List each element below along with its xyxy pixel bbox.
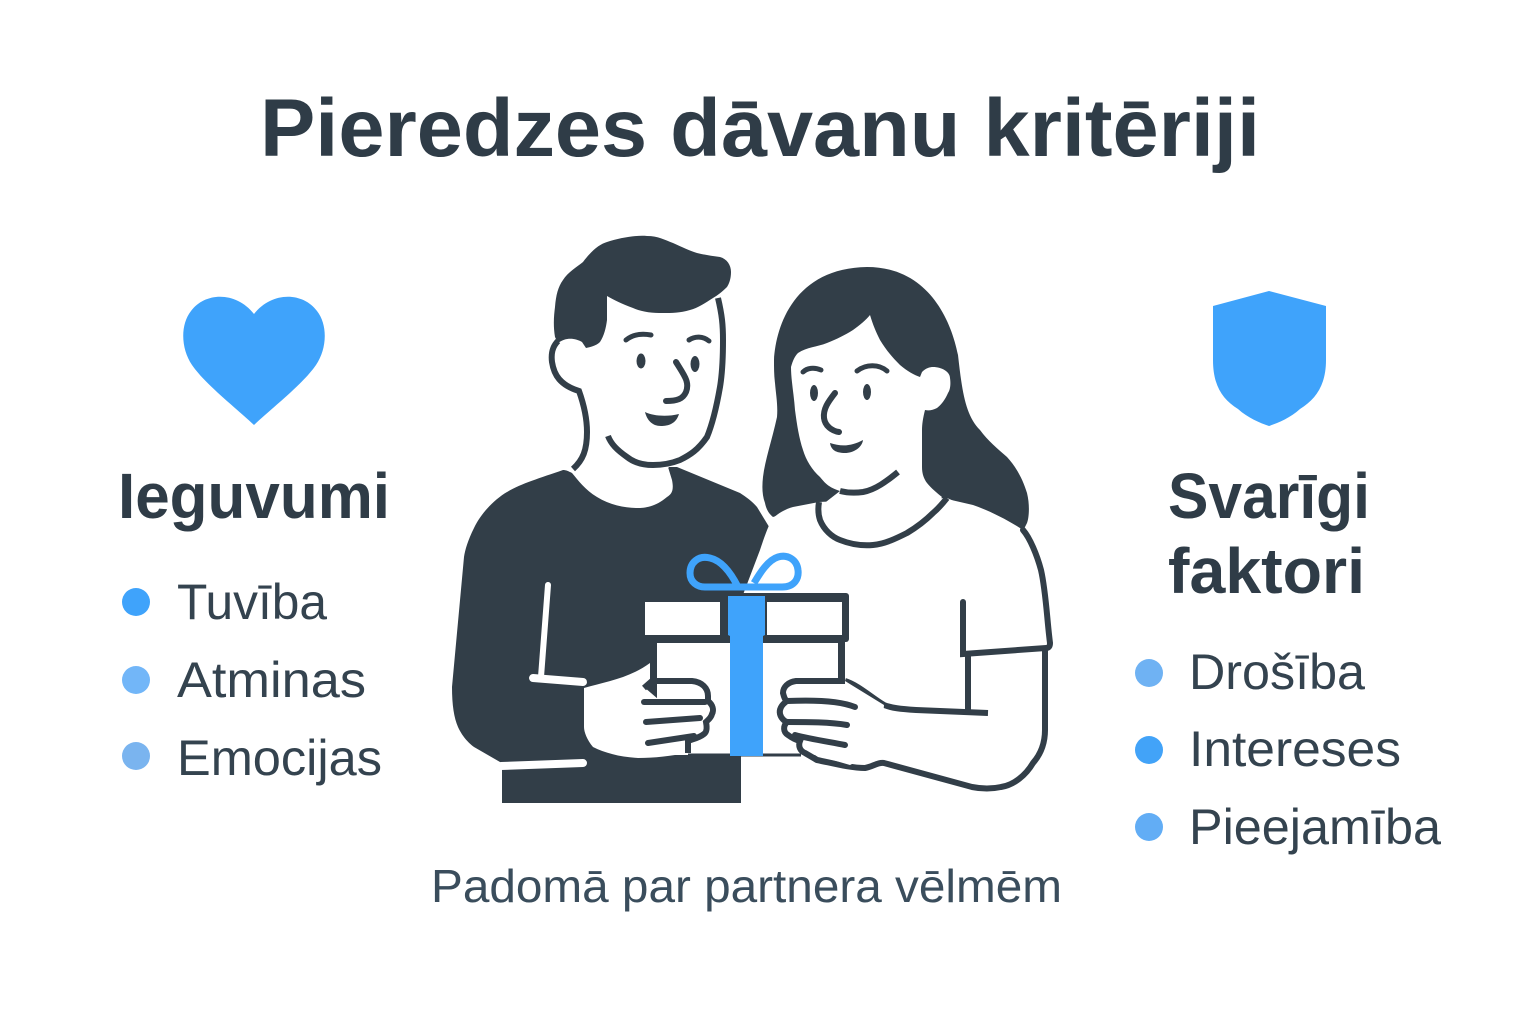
list: benefits (122, 574, 382, 786)
woman's shirt (741, 499, 1050, 787)
woman's chin (840, 472, 898, 493)
gift box (645, 556, 849, 756)
icon: heart (183, 297, 325, 425)
woman's arm and sleeve outline (805, 530, 1050, 788)
woman's head (791, 315, 950, 545)
list: important factors (1135, 644, 1441, 855)
man's face (626, 334, 709, 401)
caption: Padomā par partnera vēlmēm (431, 860, 1062, 912)
man's head (552, 236, 731, 469)
icon: shield (1213, 291, 1326, 426)
man's body (452, 467, 800, 803)
panel: important factors (1135, 291, 1441, 855)
man's sleeve lines (501, 585, 583, 766)
list: important factors: Pieejamība (1189, 799, 1441, 855)
list: benefits: Emocijas (177, 730, 382, 786)
woman's collar (818, 498, 947, 545)
woman's face (803, 366, 887, 432)
illustration: couple with gift (431, 236, 1062, 912)
list: benefits: Tuvība (177, 574, 327, 630)
panel: important factors: faktori (1168, 535, 1365, 607)
ribbon (728, 596, 765, 756)
list: benefits: Atminas (177, 652, 366, 708)
title: Pieredzes dāvanu kritēriji (260, 83, 1260, 174)
man's hand (584, 663, 713, 758)
woman's hand (779, 681, 884, 765)
woman's hair (762, 267, 1029, 531)
heading: benefits: Ieguvumi (118, 460, 390, 532)
man's hair (554, 236, 731, 348)
bow (690, 556, 798, 587)
heading: important factors: Svarīgi (1168, 460, 1370, 532)
panel: benefits (118, 297, 390, 786)
list: important factors: Drošība (1189, 644, 1365, 700)
list: important factors: Intereses (1189, 721, 1401, 777)
